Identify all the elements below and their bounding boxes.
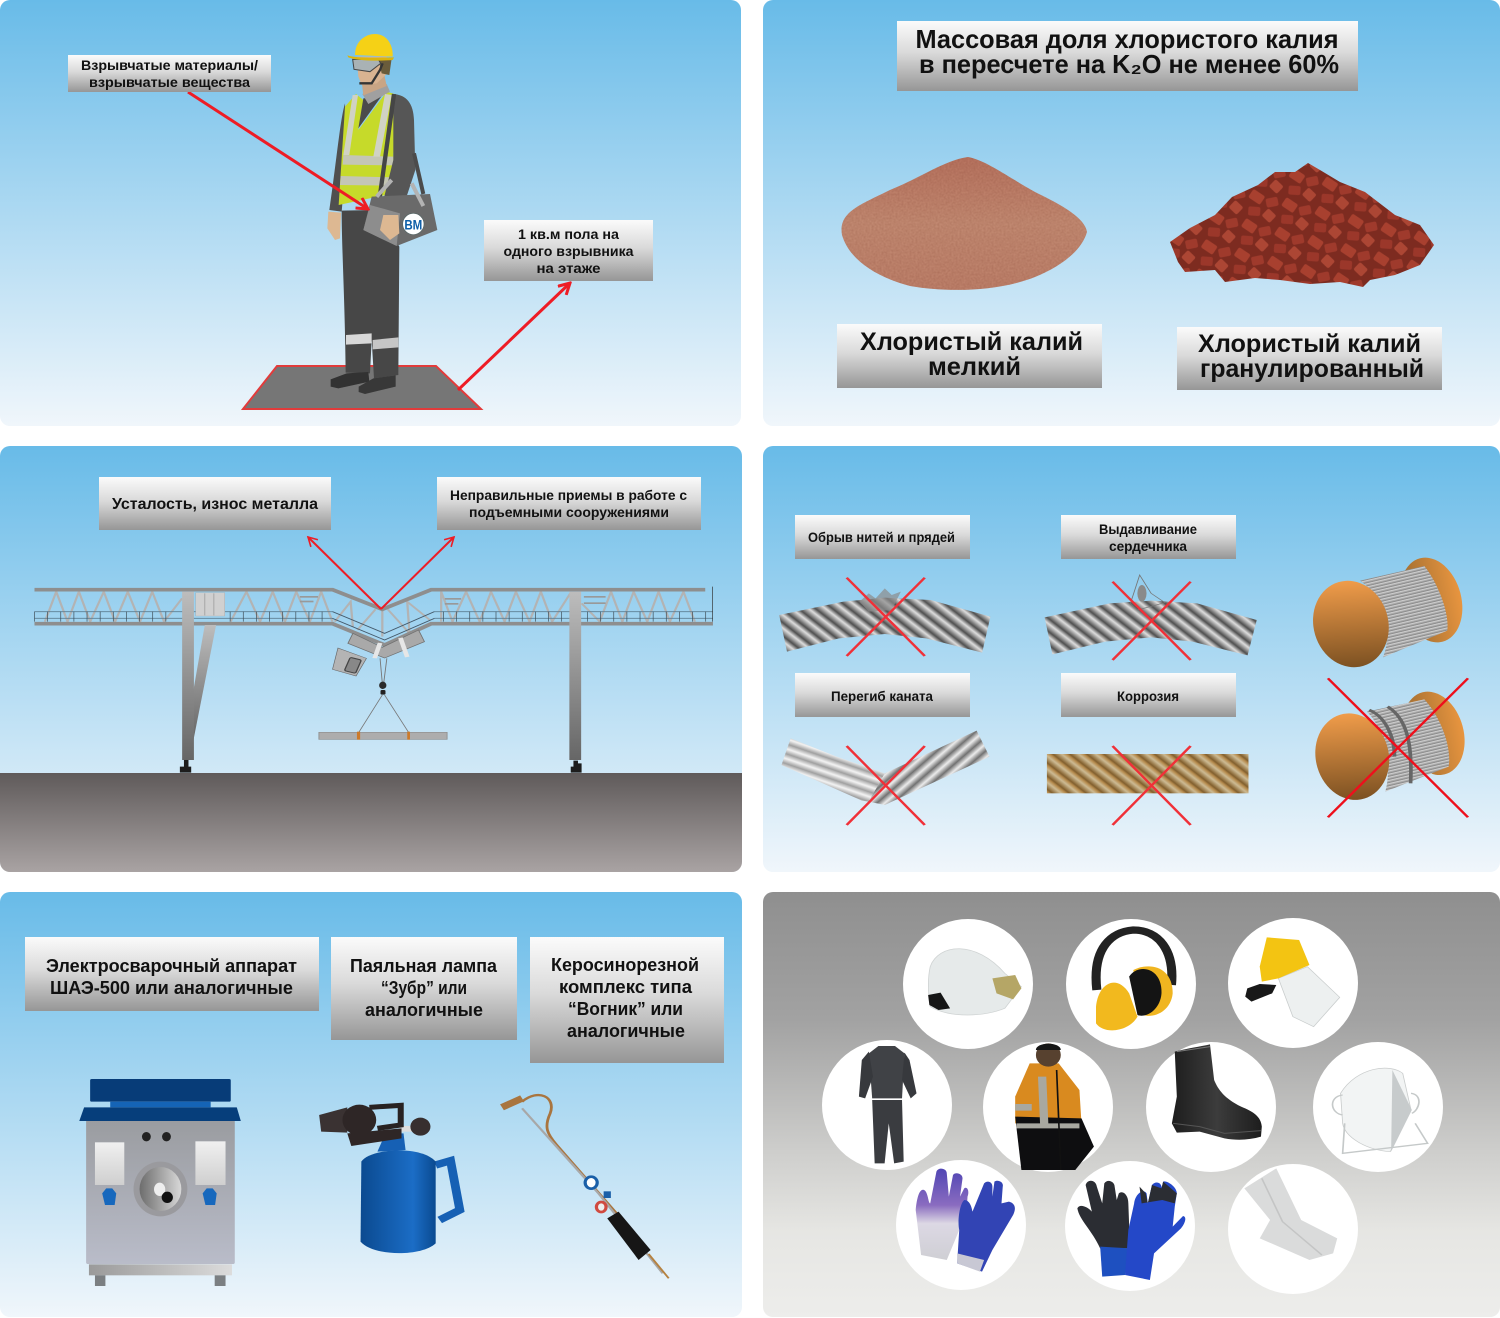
label: floor area: 1 кв.м пола на — [518, 226, 619, 242]
granulated potassium chloride pile — [1170, 163, 1434, 287]
protective items — [859, 930, 1428, 1280]
label: kerosene cutter: аналогичные — [567, 1020, 685, 1041]
spool: incorrect winding — [1310, 678, 1472, 817]
spool: correct winding — [1308, 555, 1469, 670]
icon: respirator — [1333, 1068, 1428, 1153]
rope: corrosion — [1047, 746, 1248, 825]
title — [897, 21, 1358, 91]
label: broken strands: Обрыв нитей и прядей — [808, 530, 955, 545]
icon: helmet with lamp — [928, 949, 1021, 1015]
label: welder: ШАЭ-500 или аналогичные — [50, 977, 293, 998]
panel: potassium chloride — [763, 0, 1500, 426]
label: granulated: гранулированный — [1200, 355, 1424, 383]
label: kerosene cutter: комплекс типа — [559, 976, 693, 997]
label: kerosene cutter: “Вогник” или — [568, 998, 683, 1019]
fine potassium chloride pile — [842, 157, 1087, 290]
arrow to fatigue label — [308, 537, 381, 609]
label: fine: мелкий — [928, 353, 1021, 381]
label: kerosene cutter — [530, 937, 724, 1063]
icon: underwear suit — [859, 1046, 917, 1163]
label: floor area: на этаже — [536, 260, 601, 276]
label: floor area: одного взрывника — [504, 243, 634, 259]
floor area — [243, 366, 481, 409]
label: blowlamp: Паяльная лампа — [350, 955, 498, 976]
label: misuse: Неправильные приемы в работе с — [450, 487, 687, 503]
label: misuse — [437, 477, 701, 530]
label: misuse: подъемными сооружениями — [469, 504, 669, 520]
panel background — [0, 446, 742, 872]
blowlamp — [319, 1105, 460, 1253]
label: core extrusion: сердечника — [1109, 539, 1187, 554]
label: core extrusion: Выдавливание — [1099, 522, 1197, 537]
welding machine — [79, 1079, 241, 1286]
rope: core extrusion — [1045, 575, 1257, 660]
white item circles — [822, 918, 1443, 1294]
label: kink: Перегиб каната — [831, 689, 933, 704]
label: corrosion: Коррозия — [1117, 689, 1179, 704]
label: fine: Хлористый калий — [860, 328, 1083, 356]
panel background — [763, 446, 1500, 872]
title: в пересчете на K₂O не менее 60% — [919, 49, 1339, 79]
label: kink — [795, 673, 970, 717]
label: blowlamp — [331, 937, 517, 1040]
label: floor area — [484, 220, 653, 281]
label: blowlamp: “Зубр” или — [381, 977, 467, 998]
panel: explosives per floor area — [0, 0, 741, 426]
icon: ear defenders — [1096, 930, 1173, 1030]
label: core extrusion — [1061, 515, 1236, 559]
icon: work boot — [1172, 1044, 1262, 1140]
panel background — [0, 892, 742, 1317]
label: fatigue: Усталость, износ металла — [112, 496, 318, 513]
label: fine — [837, 324, 1102, 388]
rope: broken strands — [779, 578, 990, 656]
icon: orange jacket worker — [1015, 1043, 1094, 1170]
rope illustrations — [779, 555, 1472, 825]
label: corrosion — [1061, 673, 1236, 717]
label: granulated: Хлористый калий — [1198, 330, 1421, 358]
equipment illustrations — [79, 1079, 669, 1286]
arrow to bag — [188, 92, 368, 209]
label: granulated — [1177, 327, 1442, 390]
panel background — [763, 0, 1500, 426]
icon: socks — [1244, 1168, 1337, 1260]
bag logo: BM — [404, 216, 422, 232]
label: explosives: Взрывчатые материалы/ — [81, 57, 258, 73]
label: blowlamp: аналогичные — [365, 999, 483, 1020]
label: fatigue — [99, 477, 331, 530]
gantry crane — [34, 587, 713, 773]
label: welder — [25, 937, 319, 1011]
panel: gantry crane — [0, 446, 742, 872]
panel background — [763, 892, 1500, 1317]
worker figure — [327, 34, 437, 394]
icon: latex gloves — [916, 1169, 1015, 1272]
rope: kink — [781, 731, 989, 825]
panel: steel rope defects — [763, 446, 1500, 872]
panel: personal protective equipment — [763, 892, 1500, 1317]
label: explosives: взрывчатые вещества — [89, 74, 250, 90]
panel: welding equipment — [0, 892, 742, 1317]
label: welder: Электросварочный аппарат — [46, 955, 297, 976]
title: Массовая доля хлористого калия — [916, 24, 1338, 54]
ground — [0, 773, 742, 872]
icon: face shield — [1245, 937, 1340, 1027]
label: broken strands — [795, 515, 970, 559]
arrow to floor label — [458, 283, 570, 390]
label: explosives — [68, 55, 271, 92]
panel background — [0, 0, 741, 426]
icon: coated work gloves — [1077, 1181, 1185, 1280]
kerosene cutter — [502, 1095, 669, 1278]
label: kerosene cutter: Керосинорезной — [551, 954, 699, 975]
arrow to misuse label — [381, 537, 454, 609]
